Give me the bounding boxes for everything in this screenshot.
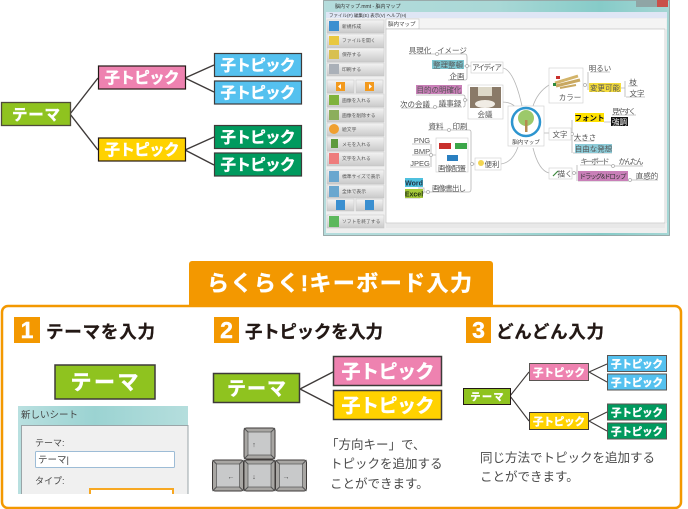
map node: ドラッグ&ドロップ: ドラッグ&ドロップ [580, 172, 627, 180]
green topic node 2: 子トピック [220, 156, 296, 174]
step 3 connector lines [510, 364, 607, 431]
map node: フォント: フォント [574, 114, 604, 122]
section tab heading [189, 261, 493, 305]
step 3 theme node [464, 388, 510, 404]
step 2 pink node [334, 356, 442, 386]
toolbar: 印刷する [342, 66, 361, 73]
step 2 heading: 子トピックを入力 [245, 322, 383, 342]
map node: 具現化: 具現化 [409, 46, 432, 55]
step 2 theme node: テーマ [227, 379, 286, 400]
map tab [386, 19, 666, 29]
toolbar: 保存する [342, 51, 361, 58]
map node: 次の会議: 次の会議 [400, 99, 430, 109]
toolbar: 新規作成 [342, 23, 361, 30]
arrow keys [212, 428, 306, 491]
map node: 印刷: 印刷 [452, 121, 468, 131]
step 1 dialog window: 新しいシート [21, 410, 78, 421]
step 1 theme node: テーマ [70, 372, 138, 394]
toolbar: 絵文字 [342, 126, 357, 133]
map node: 画像書出し: 画像書出し [432, 183, 466, 193]
step 2 description: 「方向キー」で、 [326, 437, 426, 452]
step 3 theme node: テーマ [470, 392, 504, 404]
map node: アイディア: アイディア [472, 62, 502, 72]
map node: かんたん: かんたん [618, 157, 644, 166]
map node: 会議 photo [468, 85, 503, 119]
toolbar: ソフトを終了する [342, 218, 381, 225]
map node: central tree: 脳内マップ [512, 138, 540, 146]
map node: 枝: 枝 [629, 77, 637, 87]
step 3 green node 1 [608, 404, 666, 420]
down key: ↓ [252, 474, 256, 481]
blue topic node 1: 子トピック [220, 56, 296, 74]
blue topic node 1 [214, 54, 302, 76]
map node: ドラッグ&ドロップ [578, 171, 628, 181]
map node: BMP: BMP [414, 147, 430, 156]
map node: JPEG: JPEG [410, 159, 430, 168]
toolbar: 画像を入れる [342, 97, 371, 104]
map tab: 脳内マップ [388, 20, 416, 28]
map node: PNG: PNG [414, 136, 430, 145]
step 2 description: ことができます。 [330, 476, 429, 491]
toolbar [327, 20, 384, 228]
step 2 connector lines [300, 372, 333, 406]
map node: 描く [549, 168, 572, 179]
map node: 見やすく: 見やすく [612, 107, 636, 116]
step 2 description: トピックを追加する [330, 456, 443, 471]
blue topic node 2: 子トピック [220, 84, 296, 102]
map node: Excel: Excel [405, 192, 423, 198]
menu bar [326, 12, 667, 19]
toolbar: 全体で表示 [342, 188, 366, 195]
top mind map diagram [2, 54, 302, 176]
step 2 theme node [214, 374, 300, 402]
map node: 整理整頓: 整理整頓 [433, 60, 463, 70]
map node: 描く: 描く [558, 168, 572, 178]
map node: 大きさ: 大きさ [574, 132, 596, 142]
step 2 heading [214, 317, 383, 343]
map node: 文字 (branch): 文字 [630, 88, 644, 98]
step 3 blue node 1: 子トピック [611, 358, 663, 370]
panel: keyboard input [2, 261, 681, 508]
step 1 heading: テーマを入力 [46, 322, 155, 342]
map node: カラー [549, 68, 583, 103]
map node: central tree [508, 106, 544, 146]
map node: 便利: 便利 [484, 159, 500, 169]
map node: 直感的: 直感的 [636, 170, 658, 180]
theme node: テーマ [12, 107, 60, 124]
step 3 heading: どんどん入力 [496, 322, 604, 342]
theme node [2, 102, 70, 126]
green topic node 1 [214, 126, 302, 148]
up key: ↑ [252, 442, 256, 449]
pink topic node [98, 66, 186, 89]
step 1 heading: 1 [21, 317, 34, 343]
map node: 文字: 文字 [552, 129, 568, 139]
step 3 blue node 1 [608, 356, 666, 372]
step 2 yellow node [334, 390, 442, 420]
step 2 yellow node: 子トピック [342, 395, 434, 417]
section tab heading: らくらく!キーボード入力 [207, 271, 472, 296]
step 3 description: 同じ方法でトピックを追加する [480, 450, 655, 465]
step 1 dialog window: テーマ: [35, 438, 65, 448]
map node: 強調: 強調 [612, 116, 627, 126]
yellow topic node: 子トピック [104, 141, 180, 159]
map node: Word: Word [405, 180, 423, 188]
step 1 dialog window [18, 406, 188, 494]
step 3 pink node [530, 364, 588, 380]
toolbar: 文字を入れる [342, 155, 371, 162]
right key: → [282, 474, 290, 481]
map node: 会議 photo: 会議 [478, 109, 493, 119]
step 2 heading: 2 [220, 317, 233, 343]
window title: 脳内マップ.mmt - 脳内マップ [335, 3, 401, 10]
step 1 dialog window: テーマ| [38, 455, 69, 466]
map node: 資料: 資料 [428, 121, 444, 131]
step 3 description: ことができます。 [480, 469, 579, 484]
map node: 画像配置: 画像配置 [438, 163, 466, 173]
toolbar: メモを入れる [342, 141, 371, 148]
toolbar: ファイルを開く [342, 37, 376, 44]
map node: 明るい: 明るい [589, 64, 611, 73]
step 3 heading: 3 [472, 317, 485, 343]
application screenshot [324, 0, 670, 236]
step 1 theme node [55, 365, 155, 399]
toolbar: 画像を削除する [342, 112, 376, 119]
step 3 blue node 2 [608, 374, 666, 390]
step 3 description [480, 450, 655, 484]
map node: イメージ: イメージ [437, 46, 467, 55]
menu bar: ファイル(F) 編集(E) 表示(V) ヘルプ(H) [329, 12, 407, 19]
map node: 企画: 企画 [450, 71, 465, 81]
window controls [636, 0, 668, 7]
step 3 green node 2: 子トピック [611, 426, 663, 438]
step 3 yellow node [530, 412, 588, 430]
yellow topic node [98, 138, 186, 161]
step 2 pink node: 子トピック [342, 361, 434, 383]
step 3 green node 1: 子トピック [611, 407, 663, 419]
pink topic node: 子トピック [104, 69, 180, 87]
left key: ← [228, 474, 234, 481]
map canvas [386, 29, 667, 228]
map node: キーボード: キーボード [580, 157, 610, 166]
green topic node 2 [214, 153, 302, 176]
map node: 目的の明確化: 目的の明確化 [416, 84, 462, 94]
map node: 便利 [475, 158, 501, 170]
blue topic node 2 [214, 81, 302, 104]
map node: 画像配置 [436, 138, 468, 173]
step 3 green node 2 [608, 423, 666, 439]
step 3 pink node: 子トピック [533, 367, 585, 379]
step 2 description [326, 437, 443, 491]
map node: 自由な発想: 自由な発想 [575, 144, 613, 154]
step 3 yellow node: 子トピック [533, 416, 585, 428]
map node: 変更可能: 変更可能 [590, 82, 620, 92]
step 3 blue node 2: 子トピック [611, 377, 663, 389]
toolbar: 標準サイズで表示 [342, 173, 380, 180]
step 3 heading [466, 317, 604, 343]
map node: 文字 [549, 128, 571, 140]
map node: 議事録: 議事録 [439, 98, 462, 108]
step 1 dialog window: タイプ: [35, 476, 65, 486]
map node: カラー: カラー [559, 93, 581, 102]
step 1 heading [14, 317, 155, 343]
map connector dots [426, 52, 632, 194]
green topic node 1: 子トピック [220, 128, 296, 146]
